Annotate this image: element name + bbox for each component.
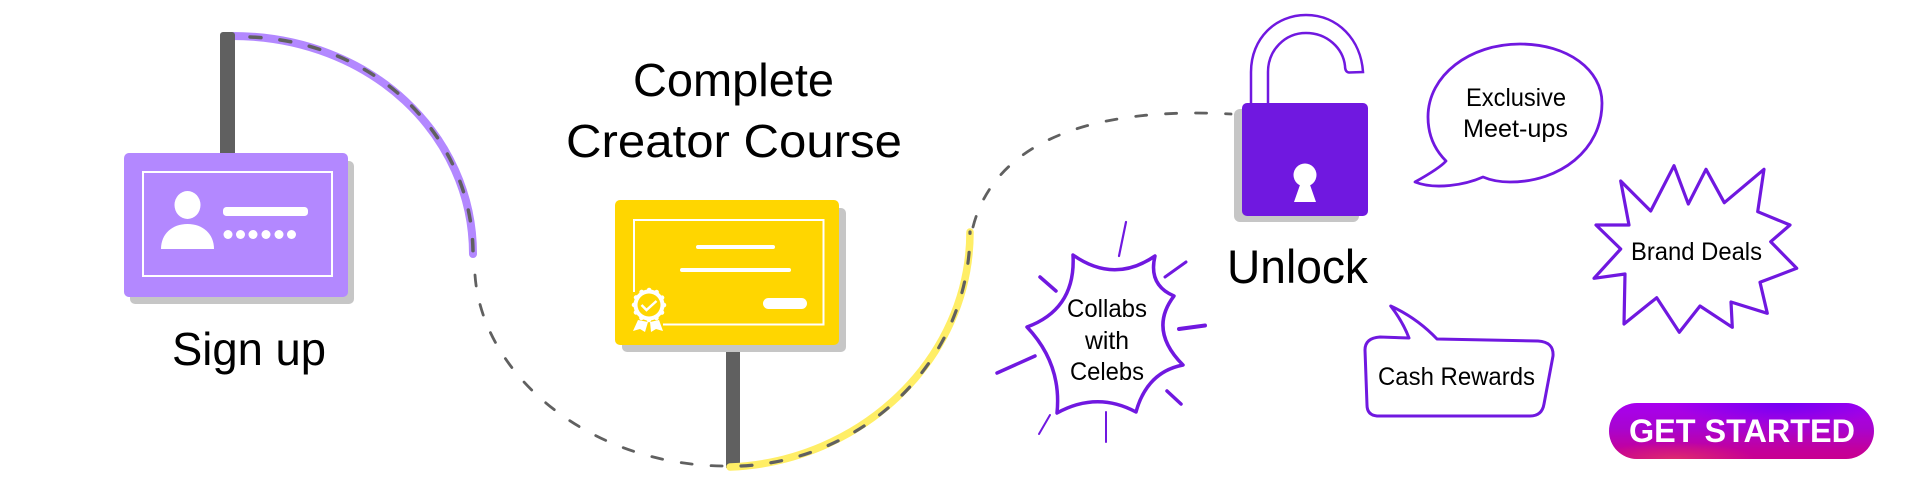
- button: get started: GET STARTED: [1629, 413, 1855, 449]
- certificate: [615, 200, 839, 345]
- burst text: Collabs: [1067, 295, 1147, 323]
- signpost pole: [726, 350, 740, 468]
- padlock shadow: [1234, 109, 1359, 222]
- id card: [124, 153, 348, 297]
- reward: cash rewards: [1365, 306, 1553, 416]
- dashed path: course to unlock: [973, 113, 1231, 227]
- purple progress arc: [232, 36, 473, 254]
- starburst text: Brand Deals: [1631, 238, 1762, 266]
- burst outline: [1027, 255, 1183, 413]
- reward: brand deals: [1594, 166, 1797, 332]
- reward: exclusive meet-ups: [1415, 44, 1602, 186]
- bubble text: [1463, 84, 1568, 143]
- label: unlock: Unlock: [1227, 240, 1368, 293]
- bubble text: Exclusive: [1466, 84, 1566, 112]
- rounded callout: [1365, 306, 1553, 416]
- burst text: Celebs: [1070, 358, 1144, 386]
- dashed path: sign up to course: [475, 275, 726, 466]
- certificate text lines: [680, 245, 807, 309]
- id name bar: [223, 207, 308, 216]
- bubble text: Meet-ups: [1463, 115, 1568, 143]
- heading: Creator Course: [566, 115, 902, 167]
- step 1: sign up: [124, 32, 473, 375]
- step 2: complete creator course: [566, 54, 970, 468]
- burst rays: [997, 222, 1205, 442]
- id number dots: [224, 230, 296, 239]
- starburst: [1594, 166, 1797, 332]
- reward: collabs with celebs: [997, 222, 1205, 442]
- dashed path over yellow arc: [741, 232, 970, 466]
- icon: user avatar: [161, 191, 214, 249]
- label: sign up: Sign up: [172, 323, 326, 375]
- heading: Complete: [633, 54, 834, 106]
- burst text: with: [1084, 327, 1129, 355]
- dashed path over purple arc: [250, 37, 473, 254]
- speech bubble: [1415, 44, 1602, 186]
- heading: [566, 54, 902, 167]
- icon: award rosette: [633, 290, 664, 332]
- id card shadow: [130, 161, 354, 304]
- icon: padlock: [1242, 15, 1368, 216]
- callout text: Cash Rewards: [1378, 363, 1535, 391]
- button: get started: [1609, 403, 1874, 459]
- yellow progress arc: [730, 232, 970, 467]
- burst text: [1067, 295, 1147, 386]
- step 3: unlock: [1227, 15, 1368, 293]
- certificate shadow: [622, 208, 846, 352]
- signpost pole: [220, 32, 235, 157]
